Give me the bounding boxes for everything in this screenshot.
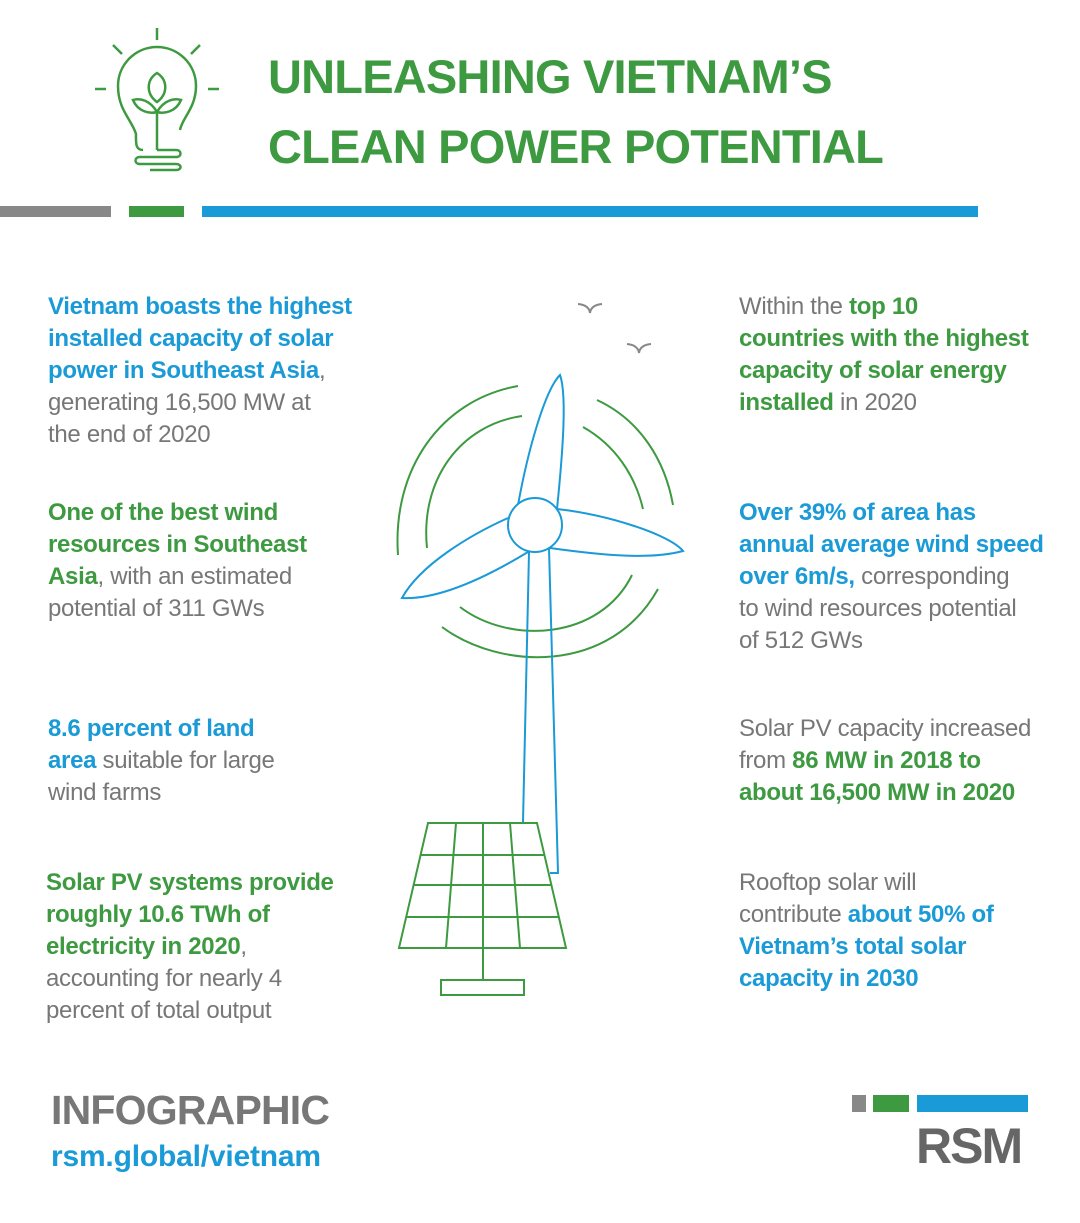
text: solar capacity: installed capacity of solar [48, 325, 333, 352]
text: solar capacity: power in Southeast Asia, [48, 357, 325, 384]
text: land area: 8.6 percent of land [48, 715, 254, 742]
footer: url: rsm.global/vietnam [51, 1140, 321, 1173]
text: wind resources: Asia, with an estimated [48, 563, 292, 590]
text: solar PV electricity: Solar PV systems provide [46, 869, 334, 896]
text: wind speed: of 512 GWs [739, 627, 863, 654]
text: wind speed [739, 499, 1044, 654]
text: solar capacity: the end of 2020 [48, 421, 210, 448]
text: solar capacity: generating 16,500 MW at [48, 389, 311, 416]
text: wind speed: Over 39% of area has [739, 499, 976, 526]
title: CLEAN POWER POTENTIAL [268, 120, 883, 173]
footer: infographic label: INFOGRAPHIC [51, 1087, 329, 1133]
text: wind resources: potential of 311 GWs [48, 595, 264, 622]
text: wind resources: resources in Southeast [48, 531, 307, 558]
text: top 10: countries with the highest [739, 325, 1029, 352]
text: wind resources: One of the best wind [48, 499, 278, 526]
icon: birds [578, 304, 651, 353]
title: UNLEASHING VIETNAM’S [268, 50, 832, 103]
text: solar PV electricity: accounting for nearly 4 [46, 965, 282, 992]
text: top 10: installed in 2020 [739, 389, 917, 416]
text: rooftop [739, 869, 994, 992]
text: rooftop: Rooftop solar will [739, 869, 916, 896]
text: top 10 [739, 293, 1029, 416]
wind arcs [397, 386, 673, 657]
text: rooftop: contribute about 50% of [739, 901, 994, 928]
text: wind speed: to wind resources potential [739, 595, 1016, 622]
logo: RSM: RSM [916, 1118, 1021, 1174]
text: solar PV electricity: roughly 10.6 TWh of [46, 901, 270, 928]
text: land area: wind farms [48, 779, 161, 806]
text: solar PV electricity: percent of total output [46, 997, 271, 1024]
text: rooftop: capacity in 2030 [739, 965, 918, 992]
text: PV increase: about 16,500 MW in 2020 [739, 779, 1015, 806]
text: solar PV electricity: electricity in 2020, [46, 933, 247, 960]
header bars [0, 206, 978, 217]
text: top 10: capacity of solar energy [739, 357, 1007, 384]
text: land area: area suitable for large [48, 747, 275, 774]
text: PV increase [739, 715, 1031, 806]
logo: RSM [852, 1095, 1028, 1174]
turbine [402, 375, 683, 873]
text: land area [48, 715, 275, 806]
text: solar PV electricity [46, 869, 334, 1024]
title [268, 50, 883, 173]
icon: light bulb with plant [95, 28, 219, 172]
text: PV increase: Solar PV capacity increased [739, 715, 1031, 742]
text: wind speed: over 6m/s, corresponding [739, 563, 1009, 590]
illustration: wind turbine and solar panel [396, 303, 685, 996]
text: wind speed: annual average wind speed [739, 531, 1044, 558]
text: solar capacity [48, 293, 352, 448]
text: PV increase: from 86 MW in 2018 to [739, 747, 981, 774]
text: rooftop: Vietnam’s total solar [739, 933, 966, 960]
text: solar capacity: Vietnam boasts the highest [48, 293, 352, 320]
text: top 10: Within the top 10 [739, 293, 918, 320]
solar panel [399, 823, 566, 995]
text: wind resources [48, 499, 307, 622]
